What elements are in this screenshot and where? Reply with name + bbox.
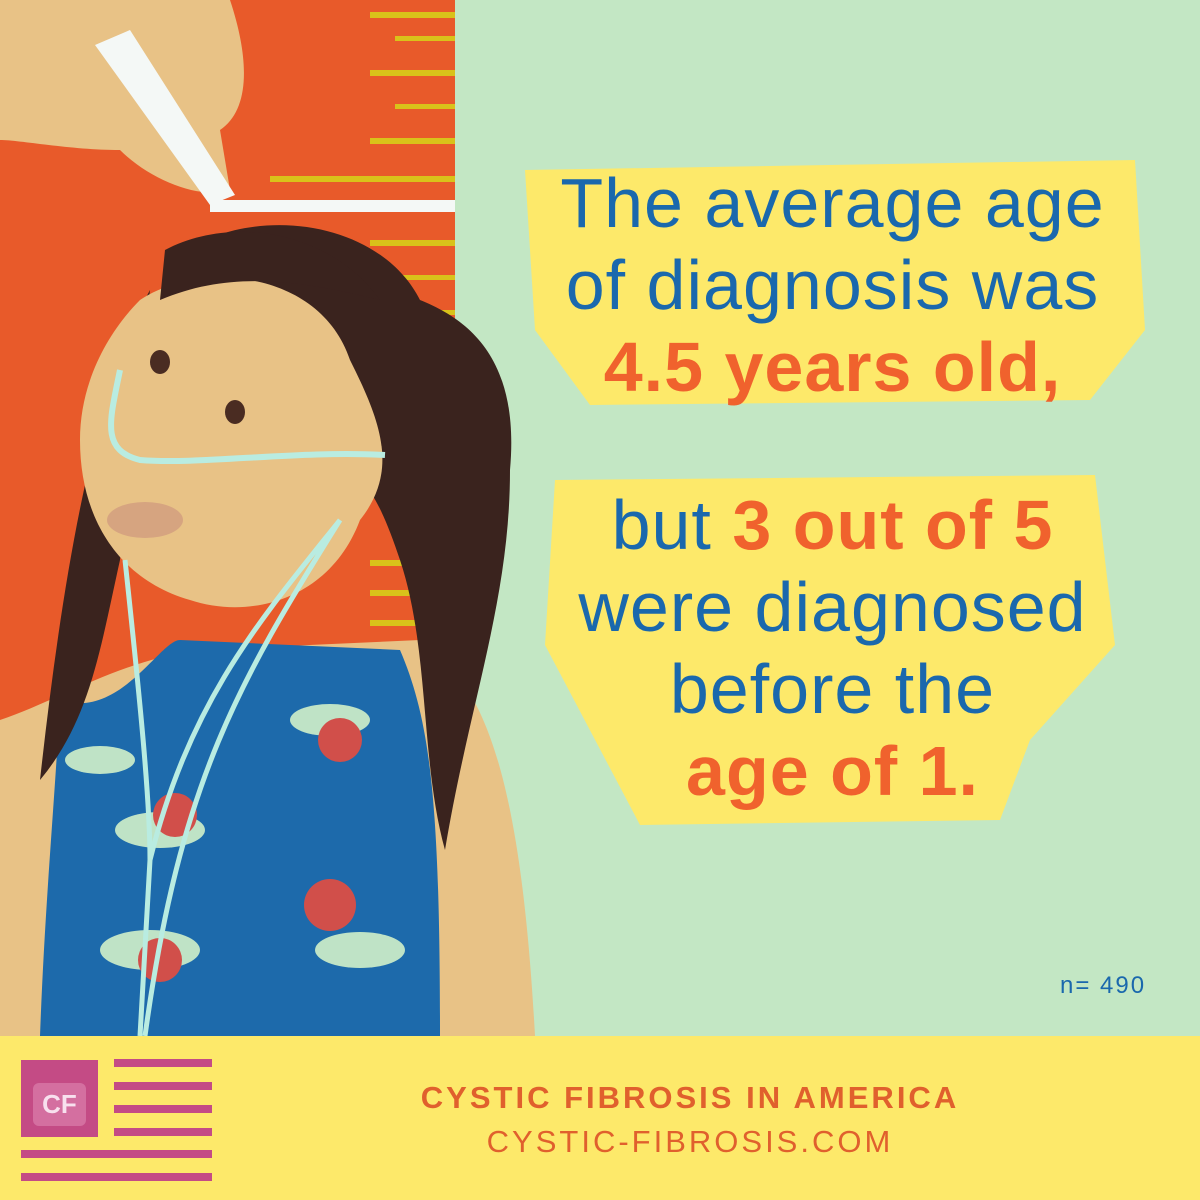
sample size: n= 490	[1060, 972, 1146, 999]
ruler ticks	[270, 12, 455, 626]
illustration: girl being measured	[0, 0, 535, 1036]
footer url: CYSTIC-FIBROSIS.COM	[487, 1124, 893, 1159]
text block 2: but 3 out of 5	[612, 486, 1053, 564]
hand with chalk	[0, 0, 455, 212]
hair back	[40, 225, 511, 850]
text block 2	[578, 486, 1087, 810]
footer title: CYSTIC FIBROSIS IN AMERICA	[421, 1080, 959, 1115]
text block 2: age of 1.	[686, 732, 979, 810]
footer	[0, 1036, 1200, 1200]
text block 2: were diagnosed	[578, 568, 1087, 646]
dress	[40, 640, 440, 1036]
text block 1	[560, 164, 1105, 406]
text block 1: of diagnosis was	[566, 246, 1099, 324]
face	[80, 232, 385, 1036]
text block 1: The average age	[560, 164, 1105, 242]
logo	[21, 1059, 212, 1181]
orange wall	[0, 0, 455, 720]
logo: CF	[42, 1089, 77, 1119]
text block 2: before the	[670, 650, 995, 728]
text block 1: 4.5 years old,	[604, 328, 1061, 406]
body skin	[0, 640, 535, 1036]
